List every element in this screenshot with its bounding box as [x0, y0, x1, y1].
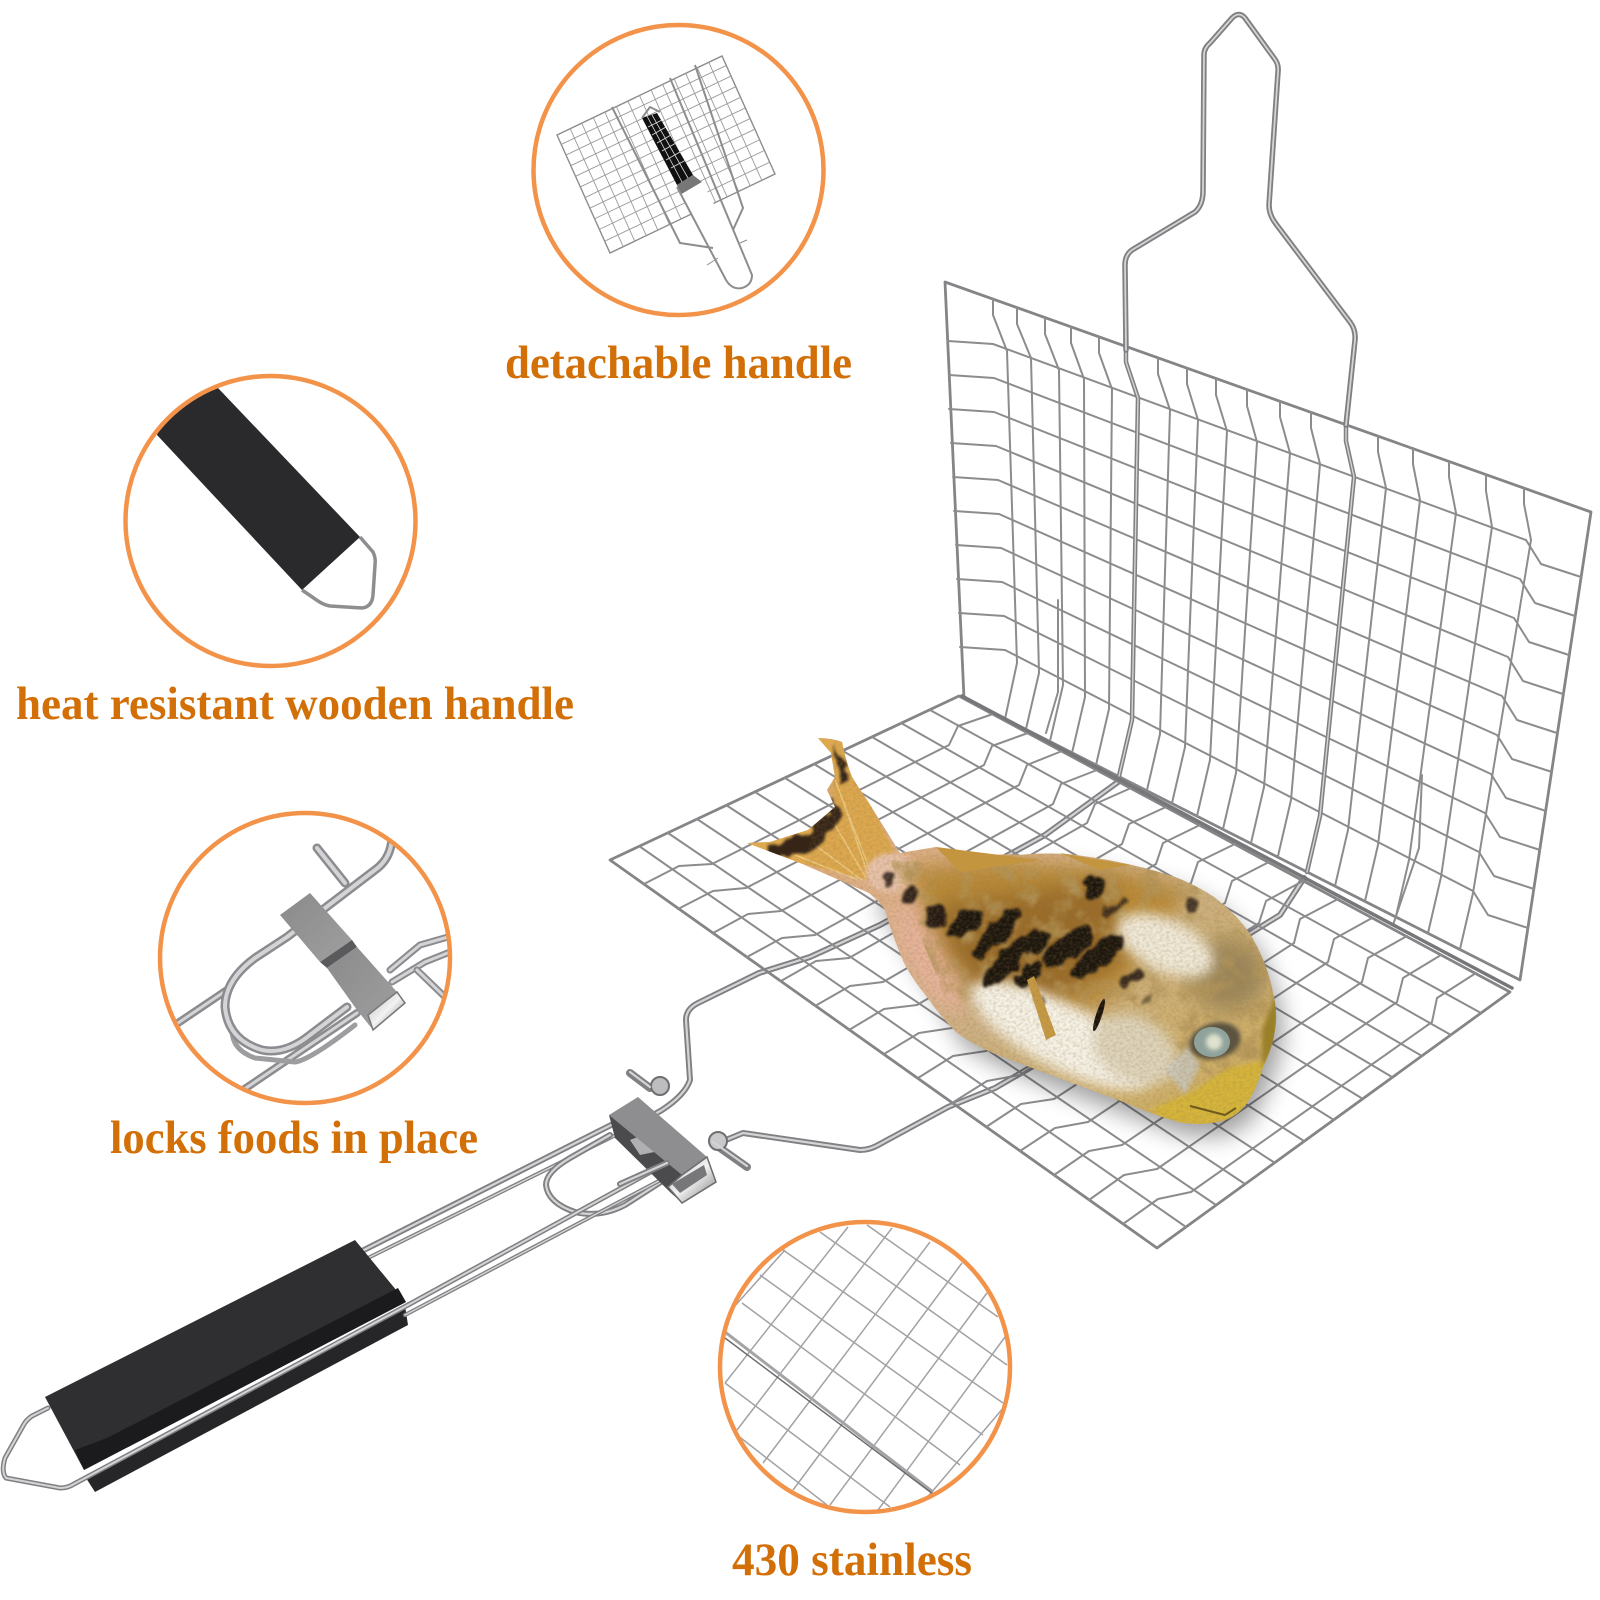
product: grill basket back panel	[945, 282, 1591, 980]
product: long handle and lock	[3, 1072, 747, 1492]
wooden handle block	[45, 1240, 408, 1492]
ring	[160, 813, 450, 1103]
fin	[1027, 976, 1056, 1040]
scorch blotches	[766, 746, 1199, 1008]
callout: 430 stainless	[720, 1222, 1010, 1586]
label: detachable handle	[505, 337, 852, 389]
inset photo: wire mesh close-up	[725, 1225, 1010, 1510]
handle end loop	[3, 1163, 672, 1488]
fish shading and scorch marks	[740, 720, 1290, 1130]
handle wires	[360, 1122, 630, 1258]
wing pins	[630, 1072, 747, 1167]
callout: heat resistant wooden handle	[16, 376, 574, 730]
locking clip	[609, 1097, 716, 1203]
label: 430 stainless	[732, 1534, 972, 1586]
tail scorch	[766, 746, 850, 860]
U-shaped loop	[546, 1135, 664, 1214]
scale texture	[805, 740, 1276, 1124]
callout: detachable handle	[505, 25, 852, 389]
fish drop shadow	[877, 867, 1283, 1136]
inset photo: folded basket	[557, 56, 775, 288]
pale belly and cheek	[962, 972, 1152, 1098]
hinge bar between panels	[962, 696, 1512, 988]
label: heat resistant wooden handle	[16, 678, 574, 730]
ring	[534, 25, 824, 315]
inset photo: lock clip close-up	[178, 835, 450, 1090]
dorsal fin	[936, 847, 1130, 872]
ring	[720, 1222, 1010, 1512]
mouth	[1190, 1106, 1236, 1115]
label: locks foods in place	[110, 1112, 478, 1164]
inset photo: handle end	[157, 380, 375, 608]
product: fork wires below the plate	[630, 782, 1304, 1150]
ring	[126, 376, 416, 666]
brown mottling	[890, 860, 1280, 1090]
product: grill basket bottom plate	[610, 696, 1510, 1248]
grilled fish	[740, 720, 1290, 1130]
callout: locks foods in place	[110, 813, 478, 1164]
eye	[1186, 1020, 1244, 1062]
fish body	[747, 738, 1276, 1124]
product: upper handle wire	[1125, 14, 1355, 425]
